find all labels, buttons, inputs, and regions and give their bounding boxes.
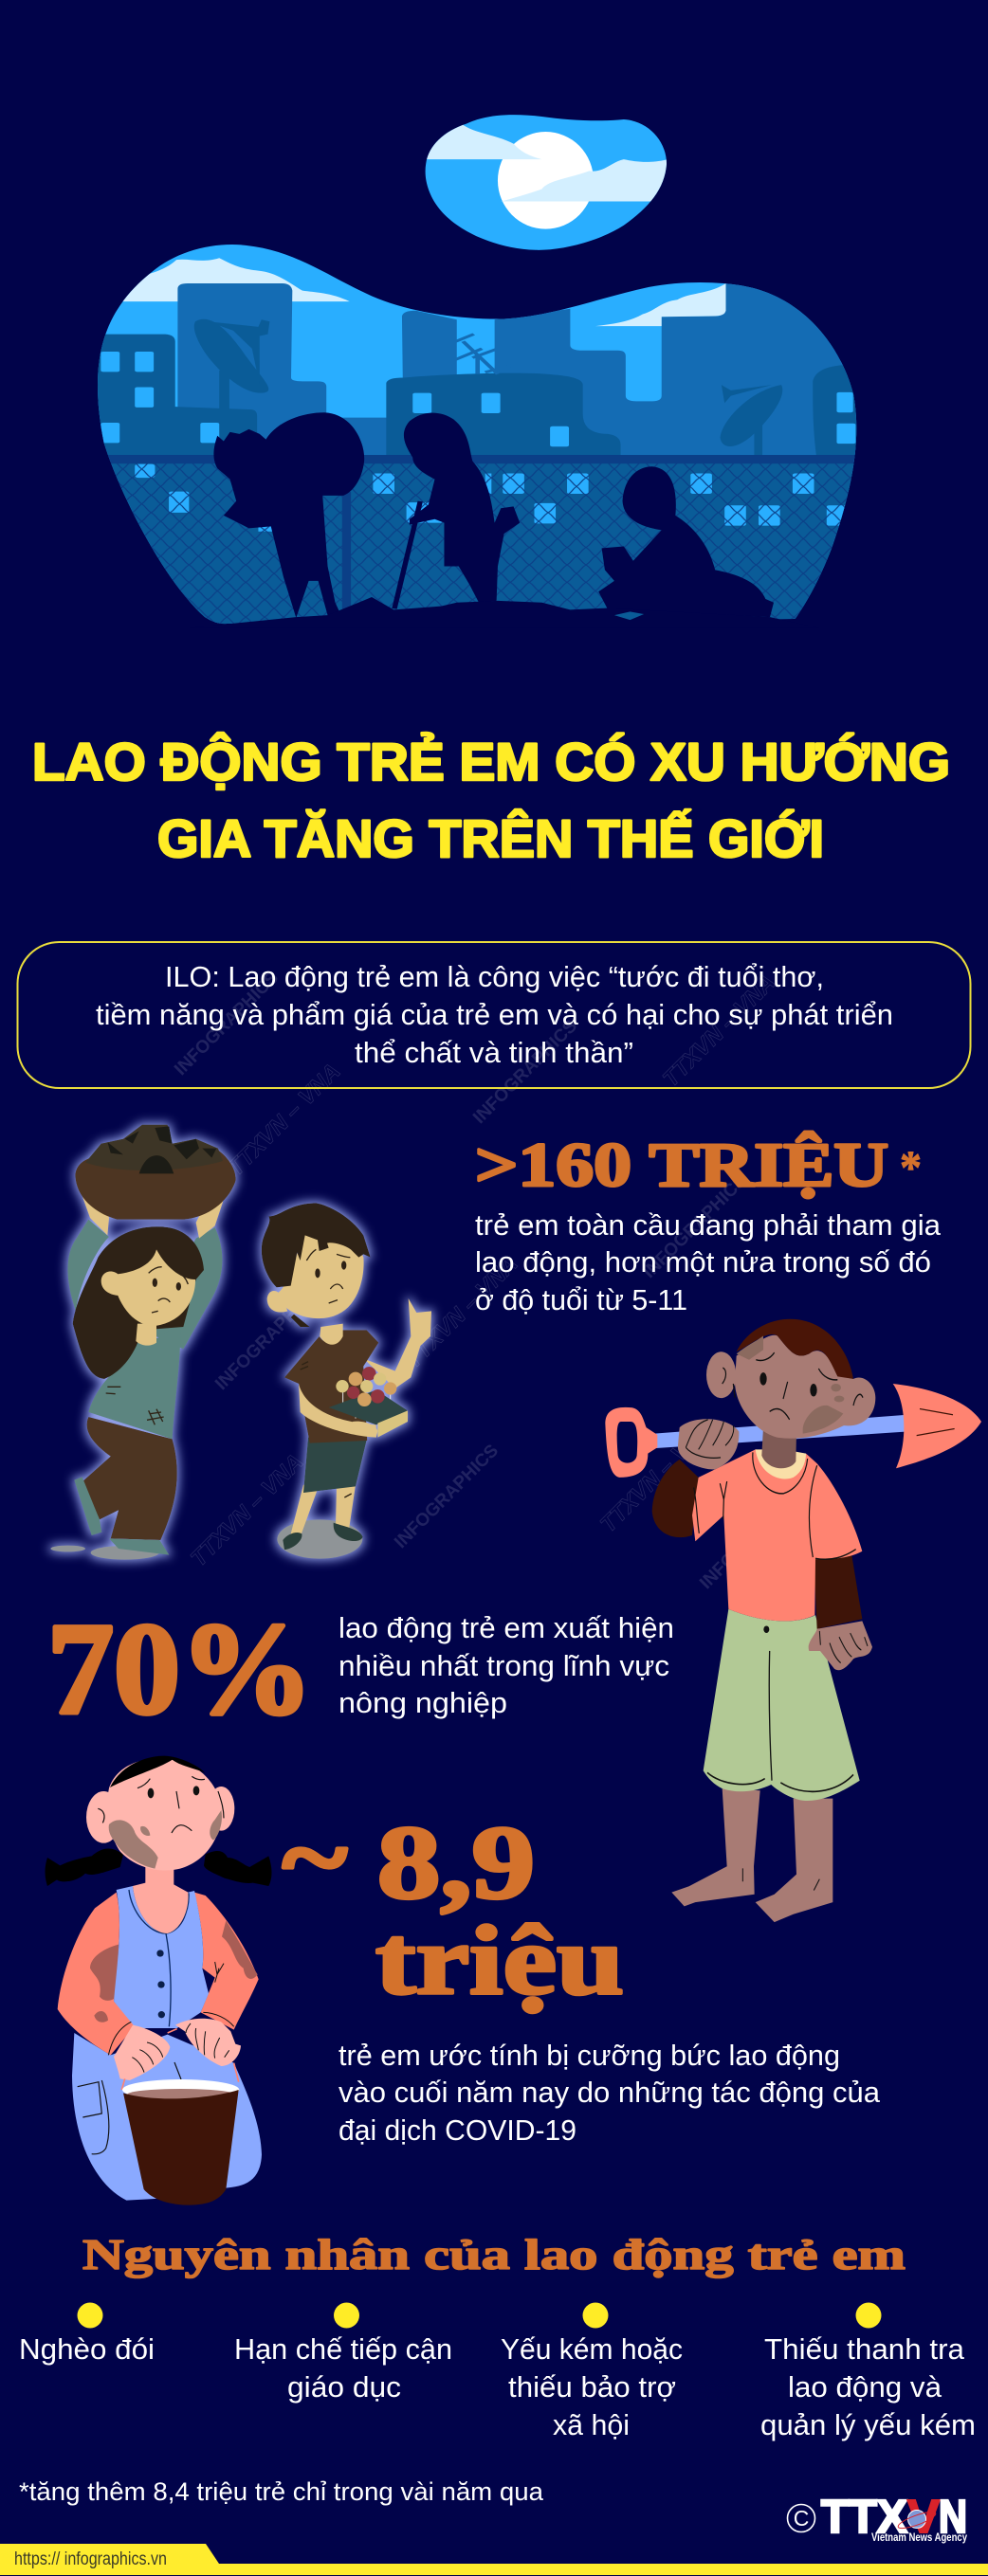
silhouettes of three children [189, 412, 819, 628]
watermarks: INFOGRAPHICS [171, 968, 283, 1079]
shorts [704, 1609, 860, 1801]
stat: about 8.9 million: 8,9 [377, 1805, 535, 1920]
logo: TTXVN: N [939, 2492, 967, 2543]
illustration: girl carrying bucket [45, 1756, 271, 2205]
definition box [17, 942, 971, 1088]
stat: about 8.9 million [283, 1802, 881, 2147]
logo: TTXVN: TTX [821, 2492, 907, 2543]
logo: TTXVN: C [794, 2506, 809, 2531]
cause: weak or missing social protection [501, 2303, 683, 2441]
cause: lack of labour inspection [760, 2303, 976, 2441]
third child seated [598, 466, 774, 617]
title [32, 732, 950, 868]
satellite dish left [194, 319, 269, 410]
watermarks: INFOGRAPHICS [391, 1441, 503, 1552]
cause: weak or missing social protection: Yếu kém hoặc [501, 2332, 683, 2366]
stat: more than 160 million: trẻ em toàn cầu đang phải tham gia [475, 1208, 942, 1242]
cause: limited access to education: Hạn chế tiếp cận [234, 2332, 452, 2366]
watermarks: TTXVN – VNA [595, 1415, 718, 1537]
footnote: *tăng thêm 8,4 triệu trẻ chỉ trong vài năm qua [19, 2477, 544, 2506]
boy with lollipops [262, 1203, 431, 1559]
first child with sack [213, 412, 364, 618]
city scene blob [88, 240, 876, 628]
stat: more than 160 million: * [900, 1140, 922, 1193]
hero illustration: moon and night city [88, 109, 876, 628]
hands [678, 1419, 739, 1469]
hands [114, 2019, 241, 2080]
arms [58, 1893, 259, 2055]
dark sleeves and shirt [652, 1460, 699, 1537]
title: GIA TĂNG TRÊN THẾ GIỚI [157, 808, 824, 868]
watermarks: INFOGRAPHICS [696, 1481, 808, 1593]
head [86, 1791, 121, 1843]
watermarks: INFOGRAPHICS [639, 1170, 751, 1282]
stat: 70 percent: lao động trẻ em xuất hiện [338, 1611, 674, 1644]
watermarks: INFOGRAPHICS [469, 1016, 581, 1128]
shovel [605, 1384, 981, 1478]
cause: weak or missing social protection: xã hội [553, 2408, 630, 2441]
braids [45, 1848, 271, 1886]
antenna [457, 334, 499, 375]
stat: about 8.9 million: đại dịch COVID-19 [338, 2113, 576, 2147]
watermarks: TTXVN – VNA [186, 1449, 308, 1571]
bucket [122, 2079, 239, 2100]
girl with basket [50, 1125, 236, 1560]
definition box: tiềm năng và phẩm giá của trẻ em và có hại cho sự phát triển [96, 998, 893, 1031]
stat: 70 percent: nhiều nhất trong lĩnh vực [338, 1649, 669, 1682]
cause: weak or missing social protection: thiếu bảo trợ [508, 2370, 676, 2404]
cause: poverty [19, 2303, 155, 2366]
watermarks: TTXVN – VNA [400, 1251, 522, 1373]
second child with stick [392, 413, 520, 609]
stat: about 8.9 million: trẻ em ước tính bị cưỡng bức lao động [338, 2039, 840, 2072]
watermarks: TTXVN – VNA [223, 1059, 345, 1181]
skirt [72, 2033, 262, 2201]
stat: 70 percent: 70% [47, 1596, 313, 1741]
logo: TTXVN: V [907, 2492, 940, 2543]
stat: about 8.9 million: triệu [375, 1906, 624, 2015]
footer bar with URL [0, 2544, 988, 2575]
heading: causes: Nguyên nhân của lao động trẻ em [82, 2230, 906, 2278]
footer bar with URL: https:// infographics.vn [14, 2549, 167, 2569]
vest [114, 1886, 209, 2028]
cause: lack of labour inspection: lao động và [788, 2370, 942, 2404]
cause: poverty: Nghèo đói [19, 2332, 155, 2366]
stat: about 8.9 million: ~ [283, 1802, 347, 1914]
stat: more than 160 million: ở độ tuổi từ 5-11 [475, 1283, 687, 1316]
watermarks: INFOGRAPHICS [211, 1282, 323, 1394]
definition box: ILO: Lao động trẻ em là công việc “tước đi tuổi thơ, [165, 960, 824, 993]
illustration: two children, girl carrying basket and boy selling lollipops [50, 1125, 431, 1560]
illustration: boy carrying shovel [605, 1319, 981, 1922]
stat: more than 160 million: lao động, hơn một nửa trong số đó [475, 1245, 931, 1279]
satellite dish right [721, 385, 782, 458]
logo: TTXVN [787, 2492, 967, 2544]
stat: 70 percent [47, 1596, 674, 1741]
cause: limited access to education [234, 2303, 452, 2404]
cause: limited access to education: giáo dục [287, 2370, 401, 2404]
title: LAO ĐỘNG TRẺ EM CÓ XU HƯỚNG [32, 732, 950, 791]
stat: about 8.9 million: vào cuối năm nay do những tác động của [338, 2076, 881, 2109]
watermarks [171, 968, 808, 1593]
definition box: thể chất và tinh thần” [355, 1036, 633, 1069]
stat: 70 percent: nông nghiệp [338, 1686, 507, 1719]
ground [189, 597, 819, 628]
legs [671, 1788, 832, 1922]
watermarks: TTXVN – VNA [658, 970, 780, 1092]
moon blob [425, 115, 667, 250]
stat: more than 160 million: >160 TRIỆU [475, 1131, 888, 1200]
neck and chest [133, 1865, 189, 1933]
cause: lack of labour inspection: Thiếu thanh tra [764, 2332, 965, 2366]
cause: lack of labour inspection: quản lý yếu kém [760, 2408, 976, 2441]
neck and head [761, 1427, 796, 1468]
stat: more than 160 million [475, 1131, 942, 1316]
